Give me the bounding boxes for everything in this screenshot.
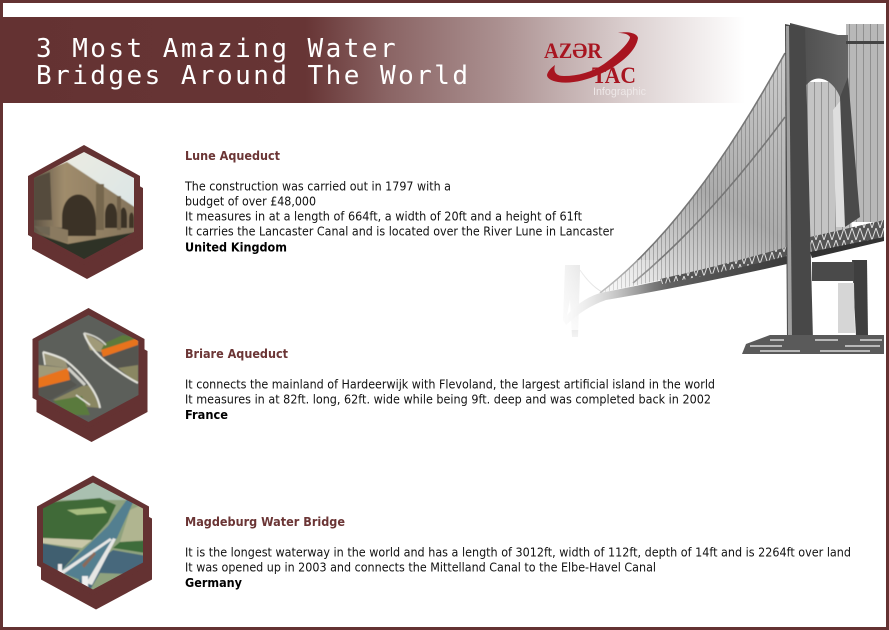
lower light panel xyxy=(838,283,855,333)
main cables xyxy=(600,53,785,293)
hexagon backing 2 xyxy=(32,308,148,442)
deck right of tower xyxy=(810,220,884,256)
description: France xyxy=(185,407,228,422)
description xyxy=(184,178,615,254)
photo: Briare canal crossing xyxy=(38,315,138,422)
left tower leg xyxy=(785,24,813,340)
description: United Kingdom xyxy=(185,240,287,254)
panel: Magdeburg Water Bridge xyxy=(37,476,851,610)
description: Germany xyxy=(185,575,242,590)
fade to left xyxy=(555,260,670,330)
title: Bridges Around The World xyxy=(36,61,470,91)
description: It measures in at a length of 664ft, a width of 20ft and a height of 61ft xyxy=(185,208,582,224)
deck xyxy=(563,250,787,325)
photo: Lune arches xyxy=(34,152,134,259)
logo: AZERTAC Infographic: TAC xyxy=(592,63,636,88)
photo: Magdeburg aerial xyxy=(43,482,143,590)
lower cross beam xyxy=(812,262,854,281)
right tower leg upper xyxy=(840,77,860,227)
tower top and arch xyxy=(790,23,848,120)
logo: AZERTAC Infographic: Infographic xyxy=(593,86,646,98)
title xyxy=(36,34,470,91)
heading: Lune Aqueduct xyxy=(185,148,280,163)
description: It was opened up in 2003 and connects the Mittelland Canal to the Elbe-Havel Canal xyxy=(185,560,656,574)
description xyxy=(185,544,851,590)
description: The construction was carried out in 1797 with a xyxy=(184,178,451,194)
base xyxy=(742,335,884,354)
description: budget of over £48,000 xyxy=(185,194,316,208)
far tower xyxy=(563,265,580,337)
panel: Lune Aqueduct xyxy=(28,145,615,279)
far side cables xyxy=(580,270,602,292)
description: It measures in at 82ft. long, 62ft. wide while being 9ft. deep and was completed back in 2002 xyxy=(185,392,711,406)
header band xyxy=(3,17,745,103)
hexagon backing 1 xyxy=(28,145,143,279)
title: 3 Most Amazing Water xyxy=(36,34,398,64)
inside of tower opening xyxy=(805,82,852,240)
panel: Briare Aqueduct xyxy=(32,308,715,442)
suspender area xyxy=(600,53,787,293)
logo: AZERTAC Infographic xyxy=(544,32,646,98)
hexagon backing 3 xyxy=(37,476,152,610)
heading: Magdeburg Water Bridge xyxy=(185,514,345,529)
bridge illustration xyxy=(555,23,884,354)
description: It carries the Lancaster Canal and is located over the River Lune in Lancaster xyxy=(185,224,615,238)
description: It connects the mainland of Hardeerwijk with Flevoland, the largest artificial island in the world xyxy=(185,376,715,392)
top strut xyxy=(846,41,884,44)
right back panel xyxy=(846,24,884,222)
description xyxy=(185,376,715,422)
logo: AZERTAC Infographic: AZƏR xyxy=(544,38,603,63)
heading: Briare Aqueduct xyxy=(185,346,288,361)
right tower leg lower xyxy=(852,260,868,336)
